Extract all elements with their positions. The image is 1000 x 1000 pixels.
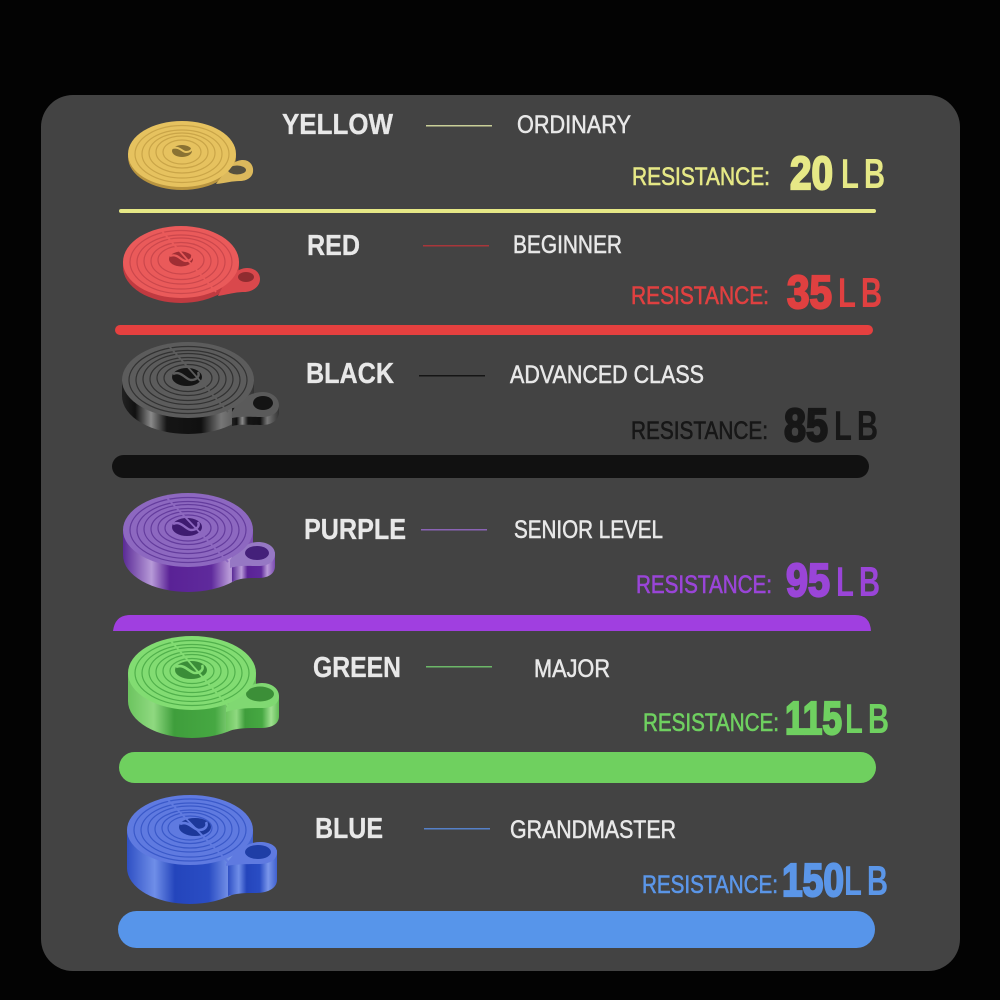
row: red band	[115, 226, 887, 335]
resistance value 150 LB: LB	[844, 857, 893, 904]
divider bar	[113, 615, 871, 631]
resistance label: RESISTANCE:	[643, 709, 779, 737]
label: purple: PURPLE	[304, 514, 406, 546]
resistance value 115 LB	[785, 692, 894, 744]
resistance label: RESISTANCE:	[631, 417, 768, 445]
row: purple band	[113, 493, 885, 631]
resistance value 150 LB: 150	[782, 854, 844, 906]
connector line	[423, 245, 489, 246]
label: blue: BLUE	[315, 813, 383, 845]
resistance value 115 LB: 115	[785, 692, 842, 744]
divider bar	[119, 209, 876, 213]
level: grandmaster: GRANDMASTER	[510, 816, 676, 844]
connector line	[421, 529, 487, 530]
level: senior level: SENIOR LEVEL	[514, 516, 663, 544]
resistance label: RESISTANCE:	[636, 571, 772, 599]
label: black: BLACK	[306, 358, 394, 390]
resistance value 20 LB: 20	[790, 147, 833, 199]
level: beginner: BEGINNER	[513, 231, 622, 259]
divider bar	[115, 325, 873, 335]
divider bar	[112, 455, 869, 478]
resistance label: RESISTANCE:	[642, 871, 778, 899]
row: yellow band	[119, 109, 890, 213]
resistance value 35 LB: LB	[838, 269, 887, 316]
connector line	[424, 828, 490, 830]
divider bar	[119, 752, 876, 783]
resistance value 20 LB	[790, 147, 890, 199]
icon: yellow band coil	[128, 121, 253, 190]
resistance value 85 LB: LB	[834, 402, 883, 449]
resistance value 35 LB	[787, 266, 887, 318]
icon: red band coil	[123, 226, 260, 303]
label: yellow: YELLOW	[282, 109, 394, 141]
resistance label: RESISTANCE:	[631, 282, 769, 310]
level: advanced class: ADVANCED CLASS	[510, 361, 704, 389]
connector line	[419, 375, 485, 376]
level: ordinary: ORDINARY	[517, 111, 631, 139]
row: green band	[119, 636, 894, 783]
label: green: GREEN	[313, 652, 401, 684]
resistance value 95 LB: 95	[786, 554, 830, 606]
resistance value 95 LB: LB	[836, 558, 885, 605]
resistance value 95 LB	[786, 554, 885, 606]
connector line	[426, 125, 492, 126]
level: major: MAJOR	[534, 655, 610, 683]
icon: purple band coil	[123, 493, 275, 592]
label: red: RED	[307, 230, 360, 262]
row: black band	[112, 342, 883, 478]
resistance value 20 LB: LB	[841, 150, 890, 197]
resistance value 150 LB	[782, 854, 893, 906]
row: blue band	[118, 795, 893, 948]
icon: blue band coil	[127, 795, 277, 904]
resistance label: RESISTANCE:	[632, 163, 770, 191]
resistance value 115 LB: LB	[845, 695, 894, 742]
icon: green band coil	[128, 636, 279, 738]
resistance value 85 LB	[784, 399, 883, 451]
divider bar	[118, 911, 875, 948]
connector line	[426, 666, 492, 668]
resistance value 85 LB: 85	[784, 399, 828, 451]
icon: black band coil	[122, 342, 279, 434]
resistance value 35 LB: 35	[787, 266, 832, 318]
